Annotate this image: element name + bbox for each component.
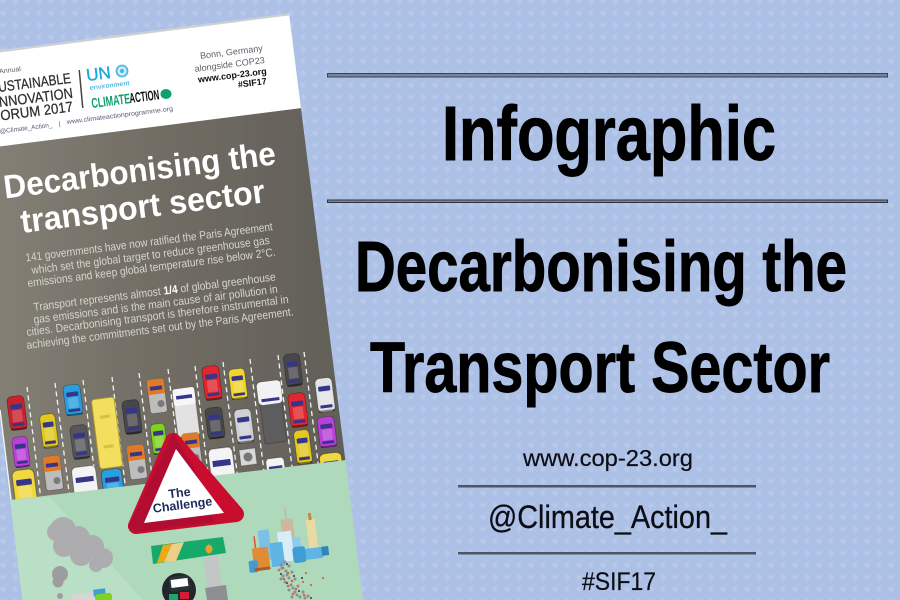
divider xyxy=(458,485,756,488)
header links: @Climate_Action_ xyxy=(0,122,53,135)
icon: fuel pump pole xyxy=(204,555,228,600)
link: website: www.cop-23.org xyxy=(522,445,693,471)
poster intro text: 141 governments have now ratified the Paris Agreement xyxy=(25,221,274,264)
event details: Bonn, Germany xyxy=(199,43,264,61)
poster intro text: cities. Decarbonising transport is therefore instrumental in xyxy=(26,294,289,339)
rule below heading xyxy=(328,200,888,202)
poster header panel xyxy=(0,14,301,146)
white truck xyxy=(172,387,200,437)
UN environment logo: UN xyxy=(85,63,112,85)
header links: | xyxy=(58,121,61,128)
yellow bus xyxy=(91,397,123,469)
hashtag: #SIF17 xyxy=(582,568,656,596)
panel: tilted poster xyxy=(0,14,363,600)
forum name xyxy=(0,66,72,120)
icon: city skyline xyxy=(248,507,330,573)
road with traffic xyxy=(0,352,345,512)
poster title xyxy=(4,144,275,232)
icon: fuel gauge xyxy=(162,573,196,600)
poster title: transport sector xyxy=(18,172,267,240)
Climate Action logo xyxy=(92,89,172,108)
poster title: Decarbonising the xyxy=(1,134,278,205)
Climate Action logo: ACTION xyxy=(128,86,160,106)
poster grey panel xyxy=(0,108,346,500)
event details xyxy=(195,46,266,88)
event details: www.cop-23.org xyxy=(196,66,267,85)
poster intro text: gas emissions and is the main cause of air pollution in xyxy=(33,284,278,326)
UN environment logo: environment xyxy=(89,80,130,92)
header links: www.climateactionprogramme.org xyxy=(65,106,174,126)
divider xyxy=(458,552,756,554)
rule above heading xyxy=(328,74,888,77)
icon: green fuel sign xyxy=(151,537,226,564)
poster intro text: which set the global target to reduce greenhouse gas xyxy=(30,235,271,277)
grey small truck xyxy=(239,448,257,466)
poster intro text: emissions and keep global temperature rise below 2°C. xyxy=(27,247,276,290)
UN environment logo xyxy=(86,64,130,90)
poster intro text: achieving the commitments set out by the Paris Agreement. xyxy=(26,306,294,352)
icon: vehicle emitting smoke xyxy=(71,588,113,600)
poster green panel xyxy=(10,460,363,600)
icon: crowd of people xyxy=(278,560,324,600)
heading: Infographic: Infographic xyxy=(442,91,776,177)
poster intro text: Transport represents almost 1/4 of global greenhouse xyxy=(33,271,276,314)
icon: exhaust smoke clouds xyxy=(47,517,113,599)
header links xyxy=(0,107,173,134)
Climate Action logo: CLIMATE xyxy=(90,90,131,111)
icon: warning triangle "The challenge": The xyxy=(168,485,191,501)
icon: warning triangle "The challenge" xyxy=(128,433,236,532)
event details: #SIF17 xyxy=(237,76,267,90)
poster intro text xyxy=(25,221,294,352)
white and grey truck xyxy=(256,380,288,444)
link: Twitter handle: @Climate_Action_ xyxy=(488,499,728,535)
event details: alongside COP23 xyxy=(194,55,265,74)
icon: warning triangle "The challenge": Challenge xyxy=(152,494,213,516)
header divider xyxy=(78,70,84,108)
